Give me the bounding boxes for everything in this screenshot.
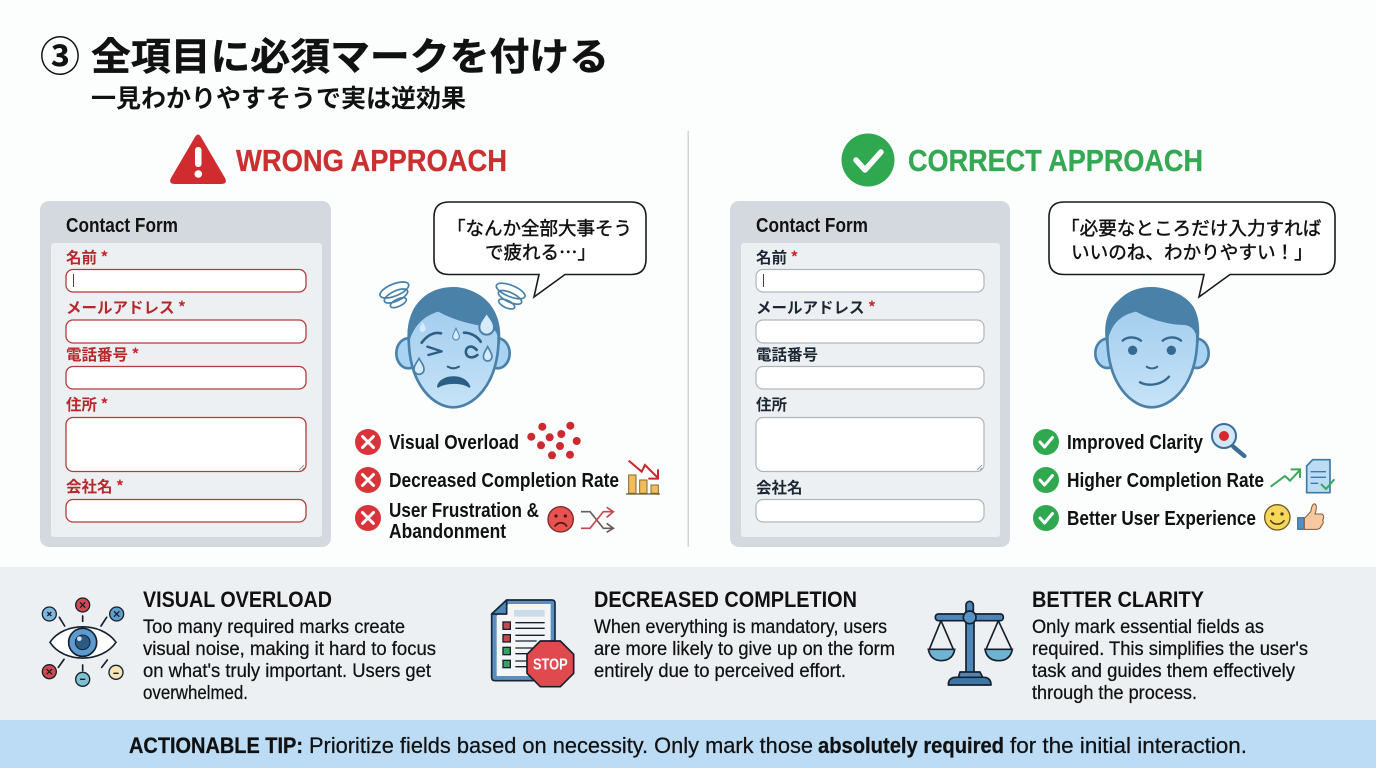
item: decreased completion rate: Decreased Completion Rate [389,469,619,492]
icon: eye with distractions [42,598,124,686]
text: visual overload: on what's truly important. Users get [143,661,432,682]
speech bubble: wrong: 「なんか全部大事そう [447,215,632,241]
text: decreased completion [594,587,895,682]
item: user frustration and abandonment [355,499,613,543]
item: visual overload: Visual Overload [389,431,519,454]
item: better user experience [1033,504,1324,531]
panel: wrong contact form: Contact Form [66,215,178,237]
item: higher completion rate [1033,460,1334,493]
speech bubble: wrong [434,202,646,297]
subtitle: 一見わかりやすそうで実は逆効果 [91,79,466,115]
item: user frustration and abandonment: Abandonment [389,520,506,543]
speech bubble: correct [1049,202,1335,297]
panel: correct contact form: 会社名 [756,476,803,498]
panel: correct contact form: 電話番号 [756,343,818,365]
text: visual overload: Too many required marks create [143,617,405,638]
callout: actionable tip: ACTIONABLE TIP: [129,733,303,758]
panel: wrong contact form: 住所 * [66,393,109,415]
panel: wrong contact form: メールアドレス * [66,296,186,318]
panel: correct contact form: 名前 * [756,246,799,268]
text: better clarity: BETTER CLARITY [1032,587,1204,612]
panel: wrong contact form [40,201,331,547]
icon: balance scale [928,601,1012,685]
item: improved clarity: Improved Clarity [1067,431,1203,454]
icon: form with stop sign: STOP [533,657,568,674]
text: better clarity: through the process. [1032,683,1197,704]
list: correct approach outcomes [1033,424,1334,531]
panel: correct contact form [730,201,1010,547]
item: decreased completion rate [355,461,660,494]
callout: actionable tip: for the initial interaction. [1010,733,1247,758]
heading: correct approach: CORRECT APPROACH [908,143,1203,178]
title: ③ [40,23,80,83]
item: better user experience: Better User Experience [1067,507,1256,530]
text: better clarity: required. This simplifies the user's [1032,639,1308,660]
callout: actionable tip: absolutely required [818,733,1004,758]
panel: correct contact form: メールアドレス * [756,296,876,318]
text: decreased completion: entirely due to perceived effort. [594,661,846,682]
text: visual overload: VISUAL OVERLOAD [143,587,332,612]
panel: correct contact form: Contact Form [756,215,868,237]
text: decreased completion: are more likely to give up on the form [594,639,895,660]
callout: actionable tip: Prioritize fields based on necessity. Only mark those [309,733,813,758]
text: decreased completion: DECREASED COMPLETION [594,587,857,612]
panel: wrong contact form: 会社名 * [66,475,124,497]
text: better clarity: task and guides them effectively [1032,661,1295,682]
icon: form with stop sign [492,600,574,687]
item: improved clarity [1033,424,1244,456]
heading: wrong approach: WRONG APPROACH [236,143,507,178]
title: 全項目に必須マークを付ける [91,26,609,81]
text: visual overload [143,587,436,704]
item: higher completion rate: Higher Completion Rate [1067,469,1264,492]
panel: explanations band [0,567,1376,720]
list: wrong approach outcomes [355,422,660,543]
icon: stressed face [378,279,527,407]
icon: warning triangle [170,134,226,184]
text: better clarity [1032,587,1308,704]
text: visual overload: overwhelmed. [143,683,248,704]
text: better clarity: Only mark essential fields as [1032,617,1264,638]
item: visual overload [355,422,581,459]
heading: correct approach [842,134,1203,186]
heading: wrong approach [170,134,507,184]
speech bubble: correct: いいのね、わかりやすい！」 [1071,238,1313,265]
text: decreased completion: When everything is mandatory, users [594,617,887,638]
panel: correct contact form: 住所 [756,393,788,415]
panel: wrong contact form: 名前 * [66,246,109,268]
speech bubble: correct: 「必要なところだけ入力すれば [1061,214,1322,241]
icon: green check [842,134,894,186]
panel: wrong contact form: 電話番号 * [66,343,140,365]
item: user frustration and abandonment: User Frustration & [389,499,539,522]
callout: actionable tip [0,720,1376,768]
icon: happy face [1095,288,1209,407]
text: visual overload: visual noise, making it hard to focus [143,639,436,660]
speech bubble: wrong: で疲れる…」 [485,239,596,265]
